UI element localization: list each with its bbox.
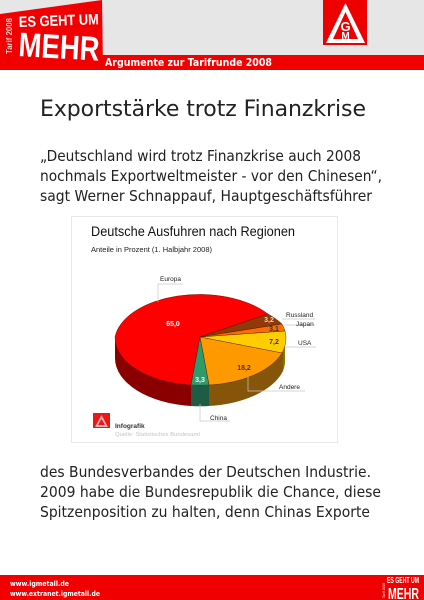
text block: intro: „Deutschland wird trotz Finanzkrise auch 2008 xyxy=(40,147,361,165)
source note: Quelle: Statistisches Bundesamt xyxy=(115,432,200,438)
infographic label: Infografik xyxy=(115,423,145,430)
chart subtitle: Anteile in Prozent (1. Halbjahr 2008) xyxy=(91,247,212,254)
text block: intro: sagt Werner Schnappauf, Hauptgeschäftsführer xyxy=(40,187,373,205)
value labels: 3,2 xyxy=(264,317,274,324)
value labels: 65,0 xyxy=(166,321,180,328)
icon: IG Metall logo xyxy=(323,0,367,45)
footer links xyxy=(10,580,100,598)
footer links: www.extranet.igmetall.de xyxy=(10,590,100,598)
header band xyxy=(0,0,424,70)
campaign logo: Es geht um mehr: Tarif 2008 xyxy=(4,18,14,54)
icon: IG Metall logo: M xyxy=(341,31,350,42)
text block: continuation: 2009 habe die Bundesrepublik die Chance, diese xyxy=(40,483,381,501)
header subtitle: Argumente zur Tarifrunde 2008 xyxy=(105,57,272,69)
leader lines xyxy=(158,284,316,421)
campaign logo: Es geht um mehr: ES GEHT UM xyxy=(19,11,99,31)
region labels: Japan xyxy=(296,321,314,328)
chart title: Deutsche Ausfuhren nach Regionen xyxy=(91,224,295,239)
icon: IG Metall logo: G xyxy=(340,19,351,34)
text block: continuation: des Bundesverbandes der Deutschen Industrie. xyxy=(40,463,371,481)
footer campaign logo: Tarif 2008 xyxy=(382,583,386,598)
footer links: www.igmetall.de xyxy=(10,580,69,588)
title: Exportstärke trotz Finanzkrise xyxy=(40,97,366,122)
pie chart xyxy=(115,276,316,422)
footer campaign logo xyxy=(382,576,419,600)
campaign logo: Es geht um mehr: MEHR xyxy=(18,26,101,69)
pie slices xyxy=(115,294,286,385)
value labels: 3,3 xyxy=(195,377,205,384)
value labels: 7,2 xyxy=(269,339,279,346)
footer band xyxy=(0,575,424,600)
pie side xyxy=(115,337,285,406)
region labels xyxy=(160,276,314,422)
region labels: USA xyxy=(298,340,312,347)
text block: continuation: Spitzenposition zu halten, denn Chinas Exporte xyxy=(40,503,370,521)
region labels: China xyxy=(210,415,227,422)
region labels: Europa xyxy=(160,276,181,283)
icon: small IG Metall logo xyxy=(93,413,110,428)
value labels: 3,1 xyxy=(269,326,279,333)
value labels: 18,2 xyxy=(237,365,251,372)
campaign logo: Es geht um mehr xyxy=(0,0,103,70)
text block: intro: nochmals Exportweltmeister - vor den Chinesen“, xyxy=(40,167,382,185)
text block: continuation xyxy=(40,463,381,521)
panel: infographic xyxy=(72,216,338,442)
text block: intro xyxy=(40,147,382,205)
value labels xyxy=(166,317,279,384)
region labels: Andere xyxy=(279,384,300,391)
region labels: Russland xyxy=(286,312,313,319)
